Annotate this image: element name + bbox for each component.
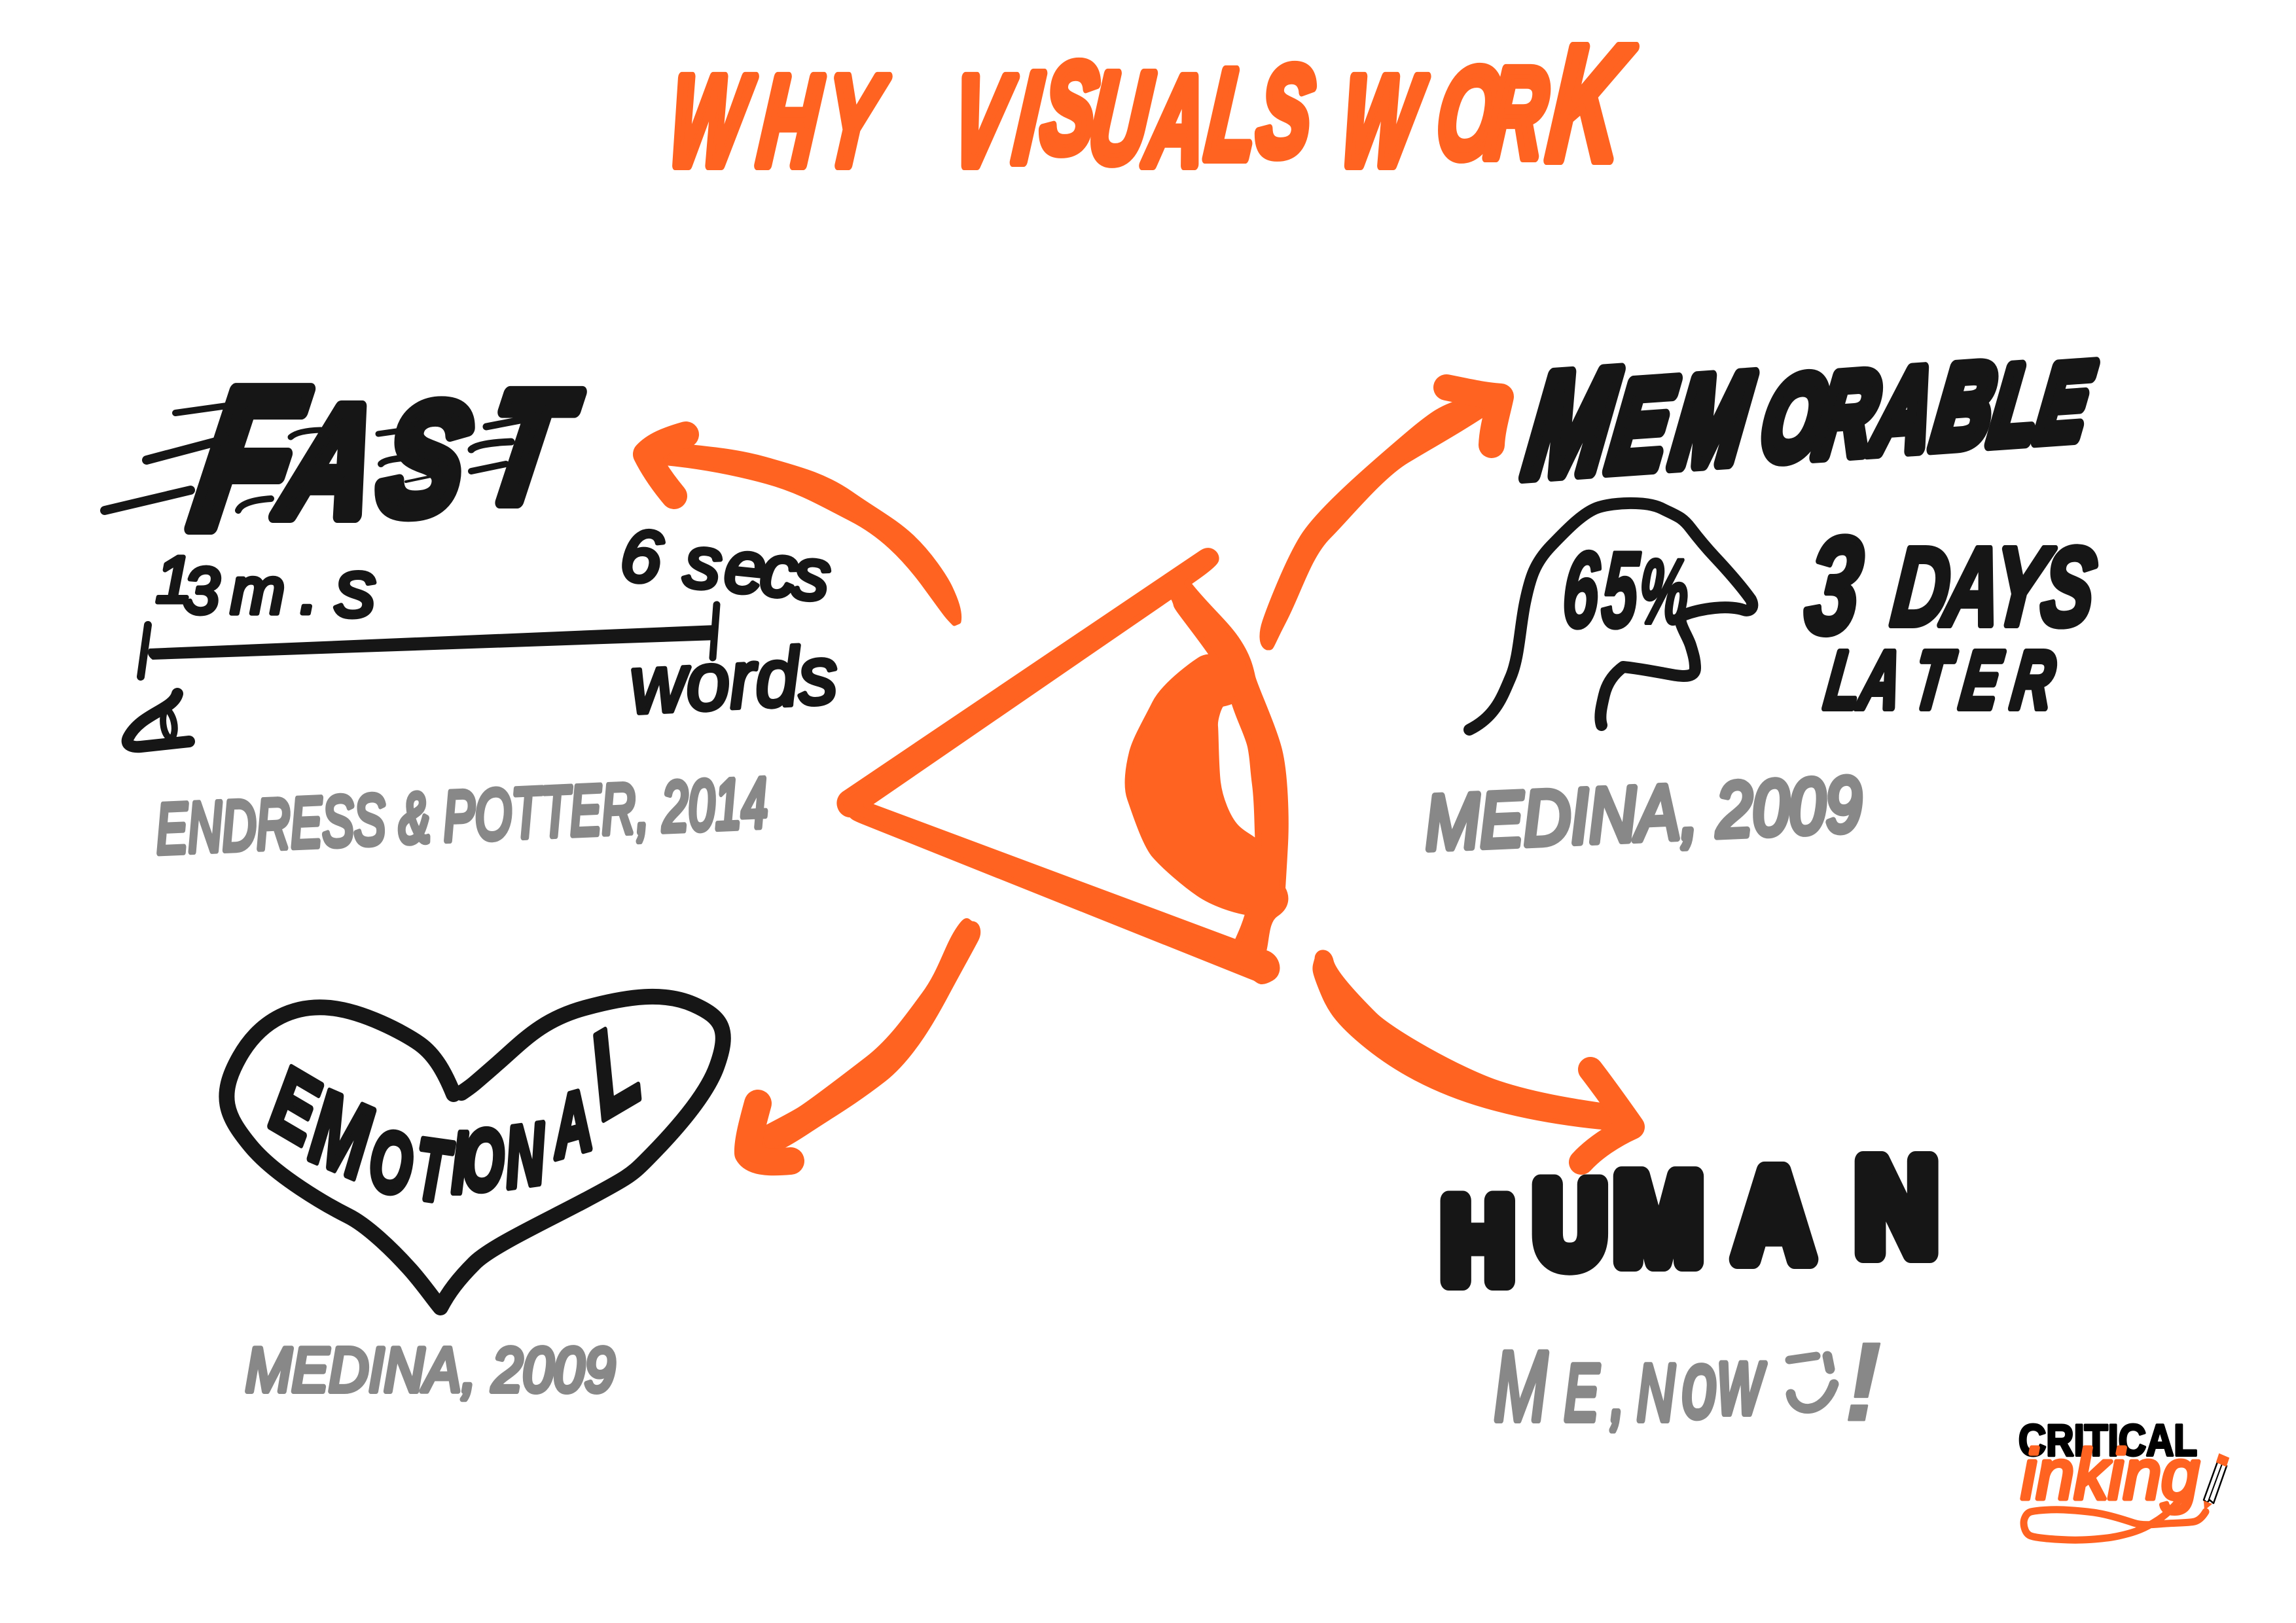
citation: me, now: ME, Now (1494, 1327, 1766, 1441)
icon: heart outline (226, 997, 723, 1308)
logo swirl (2024, 1494, 2206, 1540)
arrow: eye to emotional (748, 920, 978, 1162)
arrow: eye to fast (646, 435, 960, 624)
citation: endress and potter: ENDRESS & POTTER, 2014 (154, 762, 769, 868)
arrow: eye to memorable (1262, 387, 1501, 648)
heading: memorable: MEMORABLE (1516, 305, 2105, 508)
timeline bar (141, 605, 717, 677)
logo wordmark: critical: CRITICAL (2018, 1416, 2197, 1465)
panel: human (1442, 1133, 1938, 1444)
icon: pencil (2204, 1454, 2229, 1510)
panel: fast (105, 347, 840, 868)
label: words: words (628, 629, 840, 731)
label: later: LATER (1820, 634, 2060, 726)
icon: head profile (1469, 503, 1752, 730)
citation: medina 2009: MEDINA, 2009 (1423, 761, 1863, 866)
label: 65 percent: 65% (1560, 529, 1691, 650)
logo wordmark: inking: inking (2021, 1435, 2199, 1514)
icon: smiley (1789, 1356, 1834, 1409)
arrow: eye to human (1315, 952, 1632, 1162)
panel: memorable (1423, 305, 2105, 866)
citation: medina 2009: MEDINA, 2009 (245, 1335, 615, 1405)
heading: human: HUM A N (1442, 1133, 1938, 1306)
speed lines (105, 404, 524, 510)
heading: fast: FAST (179, 347, 590, 570)
label: 13 m.s: 13m. s (156, 543, 376, 634)
exclamation mark: ! (1844, 1320, 1882, 1444)
title: WHY VISUALS WORK (663, 12, 1640, 195)
panel: emotional (226, 992, 723, 1405)
label: 6 secs: 6 secs (617, 514, 834, 616)
central eye icon (840, 551, 1285, 981)
heading: emotional: EMOTIONAL (264, 992, 651, 1222)
icon: small eye (128, 694, 189, 747)
label: 3 days: 3 DAYS (1799, 508, 2103, 662)
logo: critical inking (2018, 1416, 2229, 1540)
